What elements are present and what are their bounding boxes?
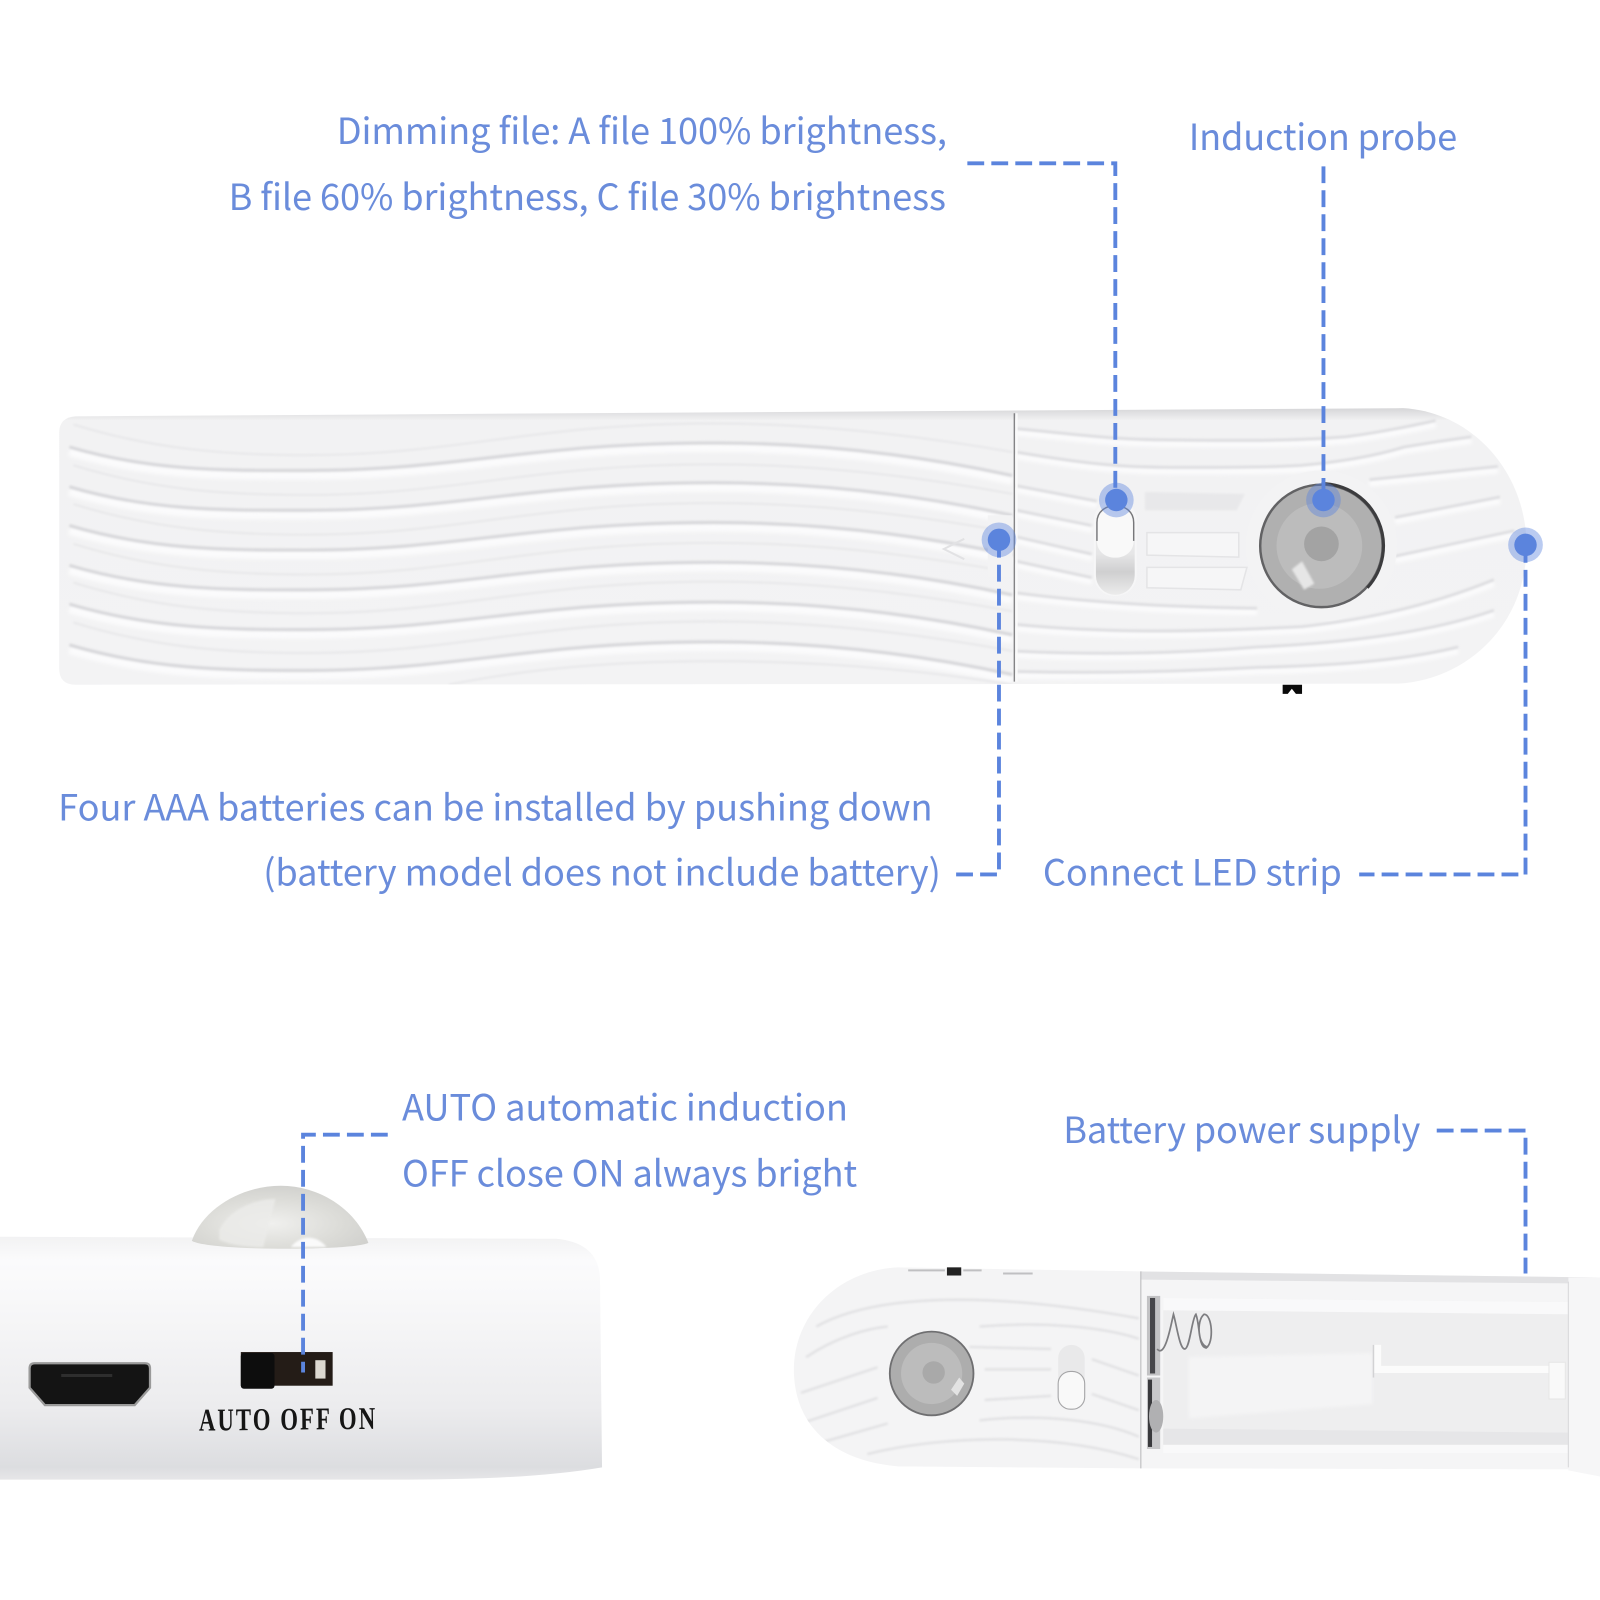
callout: LED strip: Connect LED strip — [1043, 845, 1342, 897]
icon: micro USB port — [30, 1363, 150, 1405]
icon: induction sensor lens — [1246, 470, 1397, 621]
callout: dimming file: Dimming file: A file 100% brightness, — [337, 103, 947, 155]
callout: AAA batteries — [58, 522, 1016, 897]
open battery compartment view — [794, 1267, 1600, 1477]
callout: dimming file — [229, 103, 1134, 517]
small black tab under device — [1283, 685, 1302, 694]
callout: induction probe — [1189, 109, 1457, 517]
callout: AAA batteries: (battery model does not include battery) — [263, 845, 941, 897]
icon: slide switch — [1058, 1345, 1085, 1409]
icon: sensor dome — [192, 1186, 368, 1249]
top marks on tray edge — [947, 1267, 961, 1276]
seam — [1013, 413, 1015, 682]
battery tray — [1141, 1271, 1600, 1469]
side view of device — [0, 1186, 602, 1480]
callout: AUTO OFF ON: AUTO automatic induction — [402, 1079, 848, 1131]
faint arrow — [944, 539, 964, 559]
callout: LED strip — [1043, 528, 1543, 897]
callout: AAA batteries: Four AAA batteries can be installed by pushing down — [58, 779, 933, 831]
icon: brightness slide switch — [1094, 500, 1137, 596]
icon: mode switch — [241, 1352, 333, 1389]
callout: dimming file: B file 60% brightness, C file 30% brightness — [229, 169, 946, 221]
callout: AUTO OFF ON: OFF close ON always bright — [402, 1146, 857, 1198]
callout: battery power supply: Battery power supply — [1063, 1102, 1421, 1154]
lighter strip islands — [1147, 533, 1247, 590]
main device: top view — [59, 408, 1527, 694]
icon: sensor lens — [890, 1332, 973, 1415]
icon: battery contacts and spring — [1147, 1296, 1211, 1449]
callout: AUTO OFF ON — [303, 1079, 857, 1372]
callout: induction probe: Induction probe — [1189, 109, 1457, 161]
callout: battery power supply — [1063, 1102, 1526, 1273]
end cap — [794, 1267, 1141, 1468]
switch label: AUTO OFF ON — [199, 1400, 375, 1437]
right cap — [1568, 1278, 1600, 1477]
